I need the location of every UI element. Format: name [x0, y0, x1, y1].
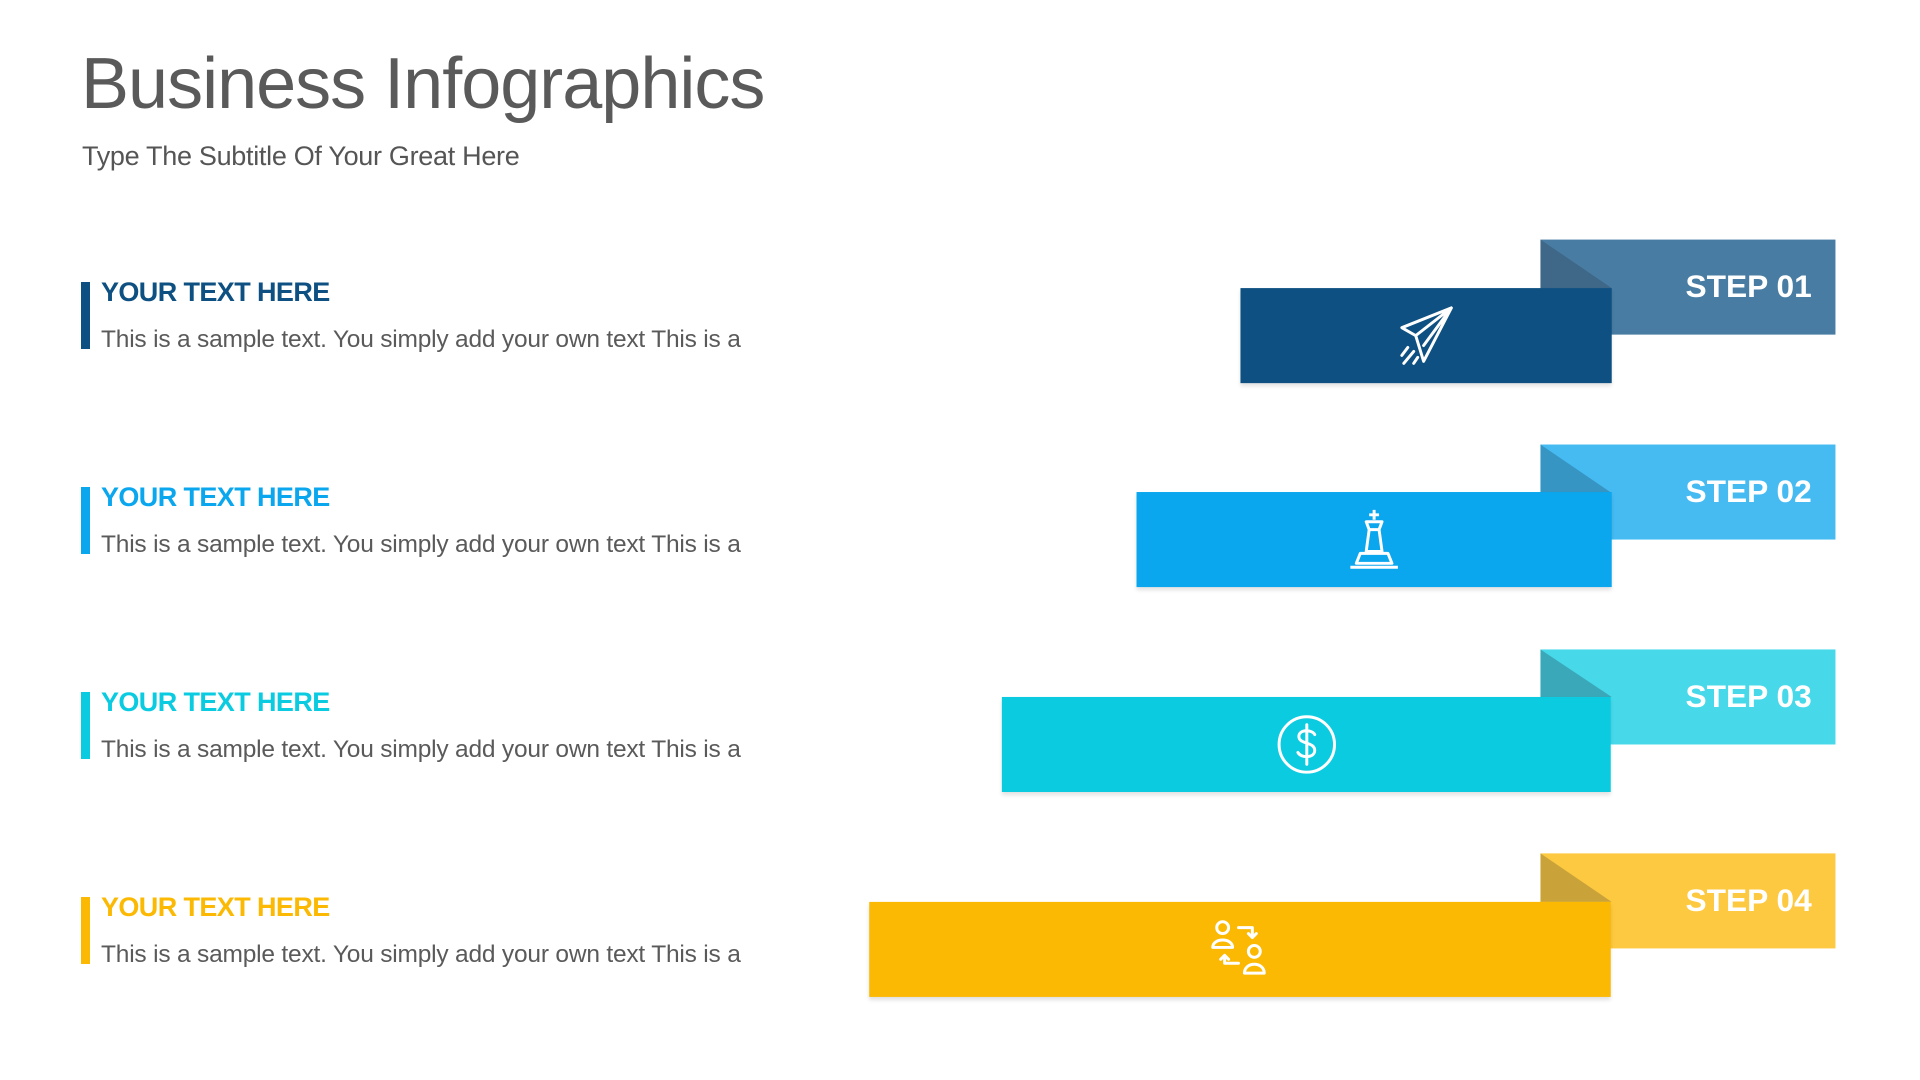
text block 2 [81, 482, 741, 558]
subtitle: Type The Subtitle Of Your Great Here [82, 141, 519, 171]
text block 3: This is a sample text. You simply add your own text This is a [101, 736, 741, 763]
text block 2: YOUR TEXT HERE [101, 482, 330, 512]
step 2 bar with icon [1137, 492, 1612, 587]
step 4 bar with icon [869, 902, 1611, 997]
step 4 ribbon [868, 853, 1836, 1001]
text block 3: YOUR TEXT HERE [101, 687, 330, 717]
text block 4: This is a sample text. You simply add your own text This is a [101, 941, 741, 968]
step 1 ribbon [1240, 240, 1836, 387]
text block 1 [81, 277, 741, 353]
step 3 tab: STEP 03 [1685, 678, 1812, 714]
text block 1: This is a sample text. You simply add your own text This is a [101, 326, 741, 353]
text block 2: This is a sample text. You simply add your own text This is a [101, 531, 741, 558]
step 4 tab: STEP 04 [1685, 882, 1812, 918]
step 2 tab: STEP 02 [1685, 473, 1812, 509]
step 3 bar with icon [1002, 697, 1611, 792]
step 2 ribbon [1136, 444, 1836, 591]
step 1 tab [1540, 240, 1835, 335]
step 2 tab [1540, 445, 1835, 540]
text block 3 [81, 687, 741, 763]
step 1 tab: STEP 01 [1685, 268, 1812, 304]
step 4 tab [1540, 853, 1835, 948]
step 3 ribbon [1001, 649, 1836, 796]
text block 1: YOUR TEXT HERE [101, 277, 330, 307]
step 3 tab [1540, 649, 1835, 744]
title: Business Infographics [81, 44, 764, 124]
text block 4: YOUR TEXT HERE [101, 892, 330, 922]
text block 4 [81, 892, 741, 968]
step 1 bar with icon [1240, 288, 1612, 383]
